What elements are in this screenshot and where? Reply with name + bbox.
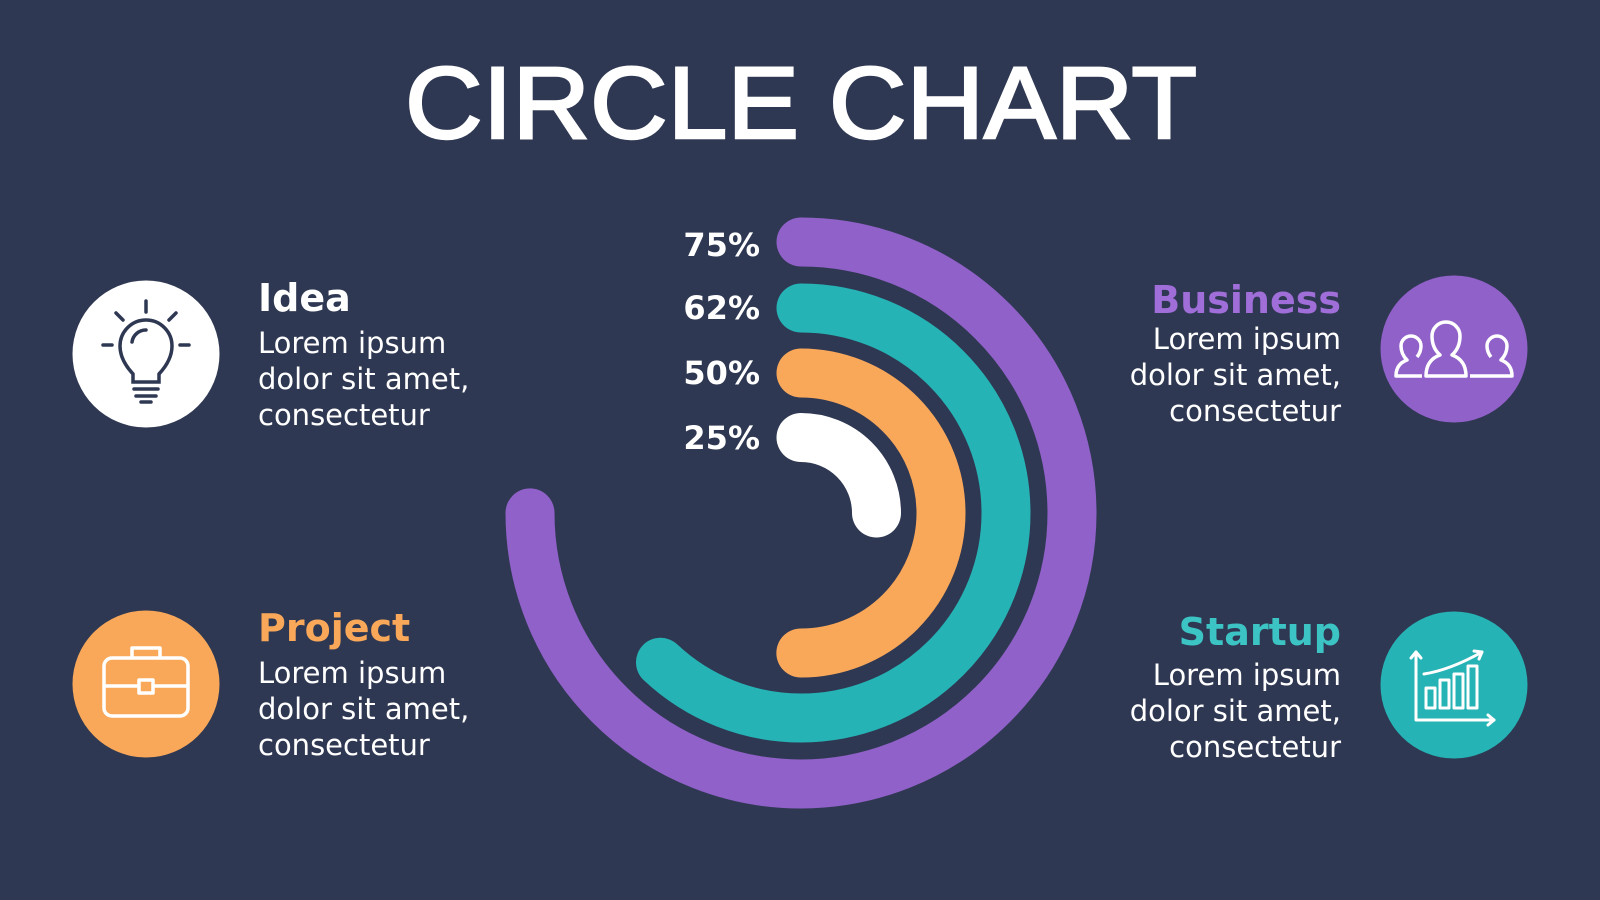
percentage labels: 50% — [683, 354, 760, 392]
text: Project: Project — [258, 606, 410, 650]
text: Idea: Lorem ipsum — [258, 326, 446, 360]
text: Startup — [1130, 610, 1341, 764]
text: Project: Lorem ipsum — [258, 656, 446, 690]
percentage labels — [683, 226, 760, 457]
icon: growth chart — [1380, 612, 1528, 758]
text: Business — [1130, 278, 1341, 428]
text: Idea: consectetur — [258, 398, 430, 432]
ring: 75% purple — [530, 242, 1072, 784]
text: Business: dolor sit amet, — [1130, 358, 1341, 392]
ring: 50% orange — [661, 373, 941, 653]
text: Project: consectetur — [258, 728, 430, 762]
percentage labels: 75% — [683, 226, 760, 264]
text: Idea: dolor sit amet, — [258, 362, 469, 396]
text: Business: Lorem ipsum — [1153, 322, 1341, 356]
text: Startup: Startup — [1179, 610, 1341, 654]
chart: circle rings — [530, 242, 1072, 784]
text: Startup: Lorem ipsum — [1153, 658, 1341, 692]
text: Idea: Idea — [258, 276, 351, 320]
icon: people — [1380, 276, 1528, 422]
text: Project — [258, 606, 469, 762]
text: Business: Business — [1151, 278, 1341, 322]
percentage labels: 25% — [683, 419, 760, 457]
icon: lightbulb — [72, 280, 220, 428]
icon: briefcase — [72, 610, 220, 758]
title: CIRCLE CHART — [405, 46, 1197, 160]
text: Idea — [258, 276, 469, 432]
ring: 25% white — [726, 438, 876, 588]
ring: 62% teal — [596, 308, 1006, 718]
text: Project: dolor sit amet, — [258, 692, 469, 726]
percentage labels: 62% — [683, 289, 760, 327]
text: Business: consectetur — [1169, 394, 1341, 428]
text: Startup: consectetur — [1169, 730, 1341, 764]
text: Startup: dolor sit amet, — [1130, 694, 1341, 728]
